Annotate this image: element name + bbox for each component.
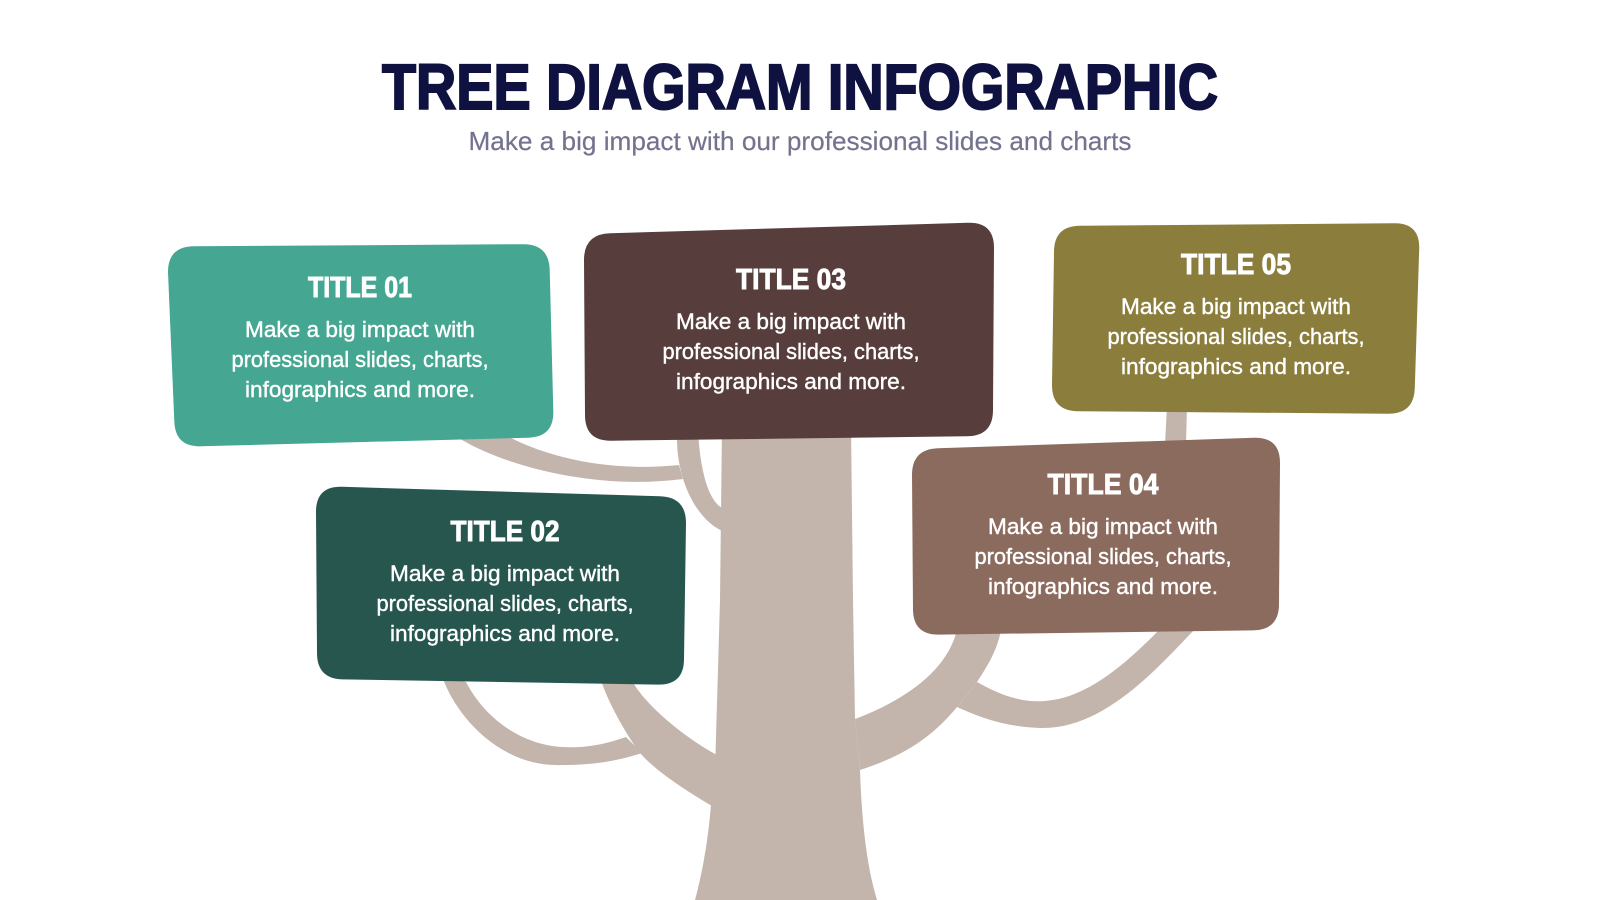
branch: lower left: [598, 670, 717, 806]
card background: [912, 438, 1280, 635]
card background: [316, 487, 686, 685]
panel: title 04: [912, 438, 1280, 635]
panel: title 02: [316, 487, 686, 685]
heading: TITLE 02: [450, 516, 560, 548]
body text: Make a big impact with: [390, 561, 620, 586]
subtitle: Make a big impact with our professional slides and charts: [468, 126, 1132, 156]
body text: professional slides, charts,: [662, 339, 920, 364]
trunk: [695, 425, 877, 900]
card background: [168, 244, 553, 446]
body text: infographics and more.: [676, 369, 906, 394]
body text: infographics and more.: [390, 621, 620, 646]
heading: TITLE 01: [308, 272, 412, 304]
body text: infographics and more.: [245, 377, 475, 402]
branch: lower right twig: [957, 628, 1196, 728]
body text: professional slides, charts,: [1108, 324, 1364, 349]
heading: TITLE 03: [736, 264, 846, 296]
body text: Make a big impact with: [676, 309, 906, 334]
body text: [974, 514, 1232, 599]
body text: Make a big impact with: [988, 514, 1218, 539]
card background: [1052, 223, 1419, 414]
tree: [442, 405, 1196, 900]
branch: lower left twig: [442, 676, 642, 765]
body text: [1108, 294, 1364, 379]
panel: title 03: [584, 223, 994, 441]
body text: Make a big impact with: [245, 317, 475, 342]
body text: professional slides, charts,: [376, 591, 634, 616]
branch: to title 01: [450, 430, 683, 482]
branch: to title 05: [1165, 405, 1187, 445]
panel: title 01: [168, 244, 553, 446]
branch: lower right: [855, 625, 1002, 770]
body text: [662, 309, 920, 394]
body text: professional slides, charts,: [974, 544, 1232, 569]
body text: infographics and more.: [1121, 354, 1351, 379]
body text: [376, 561, 634, 646]
body text: professional slides, charts,: [232, 347, 488, 372]
title: TREE DIAGRAM INFOGRAPHIC: [382, 51, 1218, 123]
card background: [584, 223, 994, 441]
heading: TITLE 04: [1048, 469, 1158, 501]
body text: Make a big impact with: [1121, 294, 1351, 319]
heading: TITLE 05: [1181, 249, 1291, 281]
panel: title 05: [1052, 223, 1419, 414]
branch: to title 03: [677, 430, 722, 531]
body text: infographics and more.: [988, 574, 1218, 599]
body text: [232, 317, 488, 402]
